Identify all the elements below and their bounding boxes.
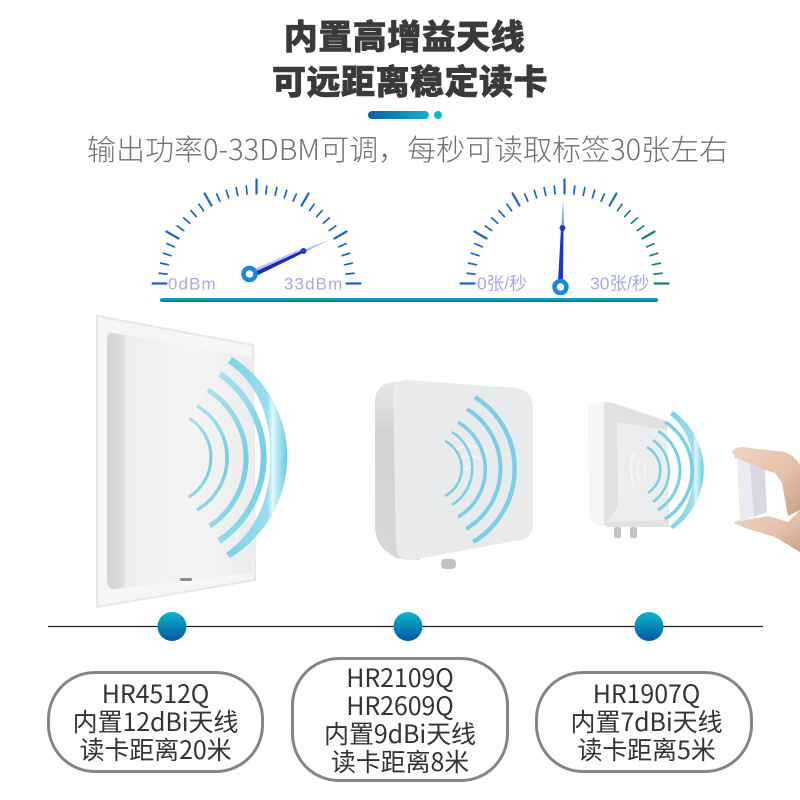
signal arcs <box>647 411 704 529</box>
connectors <box>614 527 637 538</box>
spec text 2: HR2609Q <box>346 687 454 723</box>
gauge labels: 30张/秒 <box>590 274 649 294</box>
title line 2: 可远距离稳定读卡 <box>272 55 548 104</box>
gauge labels: 0张/秒 <box>477 274 527 294</box>
gauge ticks <box>460 180 668 284</box>
spec text 1: HR4512Q <box>102 675 209 711</box>
spec text 1: 内置12dBi天线 <box>73 703 238 739</box>
faint logo <box>452 446 488 470</box>
gauge labels: 0dBm <box>168 274 217 294</box>
timeline <box>48 612 763 641</box>
spec text 1 <box>73 675 238 767</box>
spec text 3: 内置7dBi天线 <box>571 703 722 739</box>
gauge labels <box>477 274 649 294</box>
spec text 1: 读卡距离20米 <box>79 731 232 767</box>
spec text 2: 读卡距离8米 <box>331 743 469 779</box>
spec pill 1 <box>47 671 264 773</box>
spec pill 2 <box>291 657 509 782</box>
spec text 2: HR2109Q <box>346 659 454 695</box>
antenna: HR4512Q <box>97 316 287 607</box>
gauge baseline <box>160 298 658 302</box>
spec text 3 <box>571 675 722 767</box>
gauge: output power <box>152 180 360 294</box>
subtitle: 输出功率0-33DBM可调，每秒可读取标签30张左右 <box>87 127 728 169</box>
antenna: HR2109Q / HR2609Q <box>375 380 533 569</box>
gauge ticks <box>152 180 360 284</box>
spec text 3: 读卡距离5米 <box>577 731 716 767</box>
timeline dot 3 <box>634 612 664 641</box>
signal arcs <box>445 397 515 542</box>
gauge: read rate <box>460 180 668 294</box>
faint logo <box>631 452 646 488</box>
gauge labels <box>168 274 343 294</box>
title accent bar <box>368 111 442 119</box>
spec text 2: 内置9dBi天线 <box>324 715 476 751</box>
gauge needle <box>554 200 566 293</box>
timeline dot 1 <box>158 612 186 641</box>
gauge labels: 33dBm <box>284 274 343 294</box>
hand holding card <box>732 447 800 552</box>
signal arcs <box>189 357 287 558</box>
gauge needle <box>244 240 329 280</box>
title line 1: 内置高增益天线 <box>284 10 525 59</box>
spec text 3: HR1907Q <box>593 675 700 711</box>
timeline dot 2 <box>394 612 422 641</box>
spec pill 3 <box>535 671 753 773</box>
spec text 2 <box>324 659 476 779</box>
antenna: HR1907Q <box>588 402 704 538</box>
